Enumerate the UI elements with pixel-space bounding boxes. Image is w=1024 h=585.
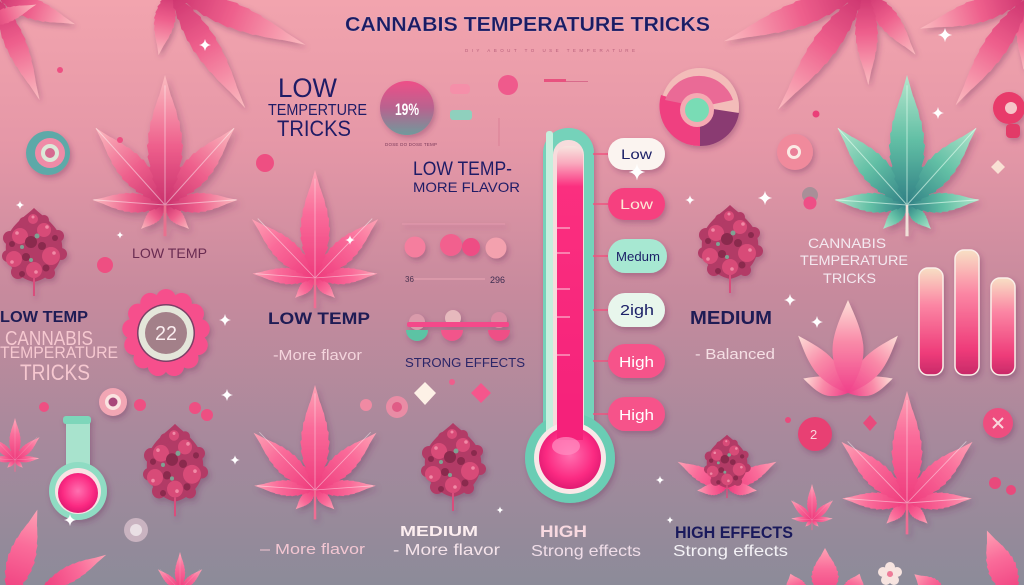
heading: low temperture tricks [268,73,367,141]
icon: target left [99,388,127,416]
big leaf: low temp left [85,75,245,236]
pill: medium [608,239,667,273]
left pink title: TRICKS [20,360,90,385]
badge: 19 percent [380,81,434,135]
heading: low temperture tricks: TEMPERTURE [268,102,367,119]
right caption: CANNABIS [808,235,886,251]
pill: low white: Low [621,146,653,162]
badge: 19 percent: 19% [395,100,419,119]
sparkles [16,28,952,526]
red ring icon [993,92,1024,138]
icon: button two [798,417,832,451]
bar chart [919,250,1015,375]
label: strong effects: Strong effects [531,543,641,560]
range line: 36 [405,275,414,284]
bud: bottom left [143,424,208,516]
icons: small markers centre [124,396,408,542]
label: low temp far left: LOW TEMP [0,309,88,326]
title: CANNABIS TEMPERATURE TRICKS [345,14,710,36]
icon: small dots left [39,67,274,421]
range line [405,275,505,285]
subheading: low temp more flavor [413,159,520,195]
label: low temp bold: LOW TEMP [268,309,370,328]
bottom blades right [780,525,1024,585]
pill: high pink two [608,397,665,431]
icon: small marks right [785,415,1016,495]
label: high effects: HIGH EFFECTS [675,523,793,542]
right caption [800,235,908,286]
pill: high pink two: High [619,407,654,424]
pill: low white [608,138,665,170]
target icon right [777,134,813,170]
sub-caption: DIY ABOUT TO USE TEMPERATURE [465,48,635,53]
bud: medium [698,205,763,293]
leaf and bud: high [674,435,780,498]
gear badge: 22 [155,323,177,345]
flower [878,562,902,585]
label: balanced: - Balanced [695,346,775,363]
right caption: TRICKS [823,270,876,286]
pill: high pink one: High [619,354,654,371]
leaves: top centre-left [148,0,310,115]
big leaf: bottom right [833,391,981,534]
small leaf bottom left [0,418,43,472]
label: medium: MEDIUM [690,308,772,328]
connector lines [593,154,608,414]
gear badge [121,289,211,378]
donut chart [659,68,739,146]
pill: high white: 2igh [620,302,654,319]
slider graphic [406,310,510,341]
pill: high white [608,293,665,327]
bud: bottom centre [421,423,486,511]
label: more flavor white: - More flavor [393,542,501,559]
pill: high pink one [608,344,665,378]
pill: low pink [608,188,665,220]
icon: button two: 2 [810,427,817,442]
leaves: top centre-right [720,0,924,117]
subheading: low temp more flavor: MORE FLAVOR [413,179,520,195]
caption under badge: DOSE DO DOSE TEMP [385,142,437,147]
leaf: low temp centre [244,170,386,308]
small icons right [802,110,1005,210]
leaves: top-right corner [916,0,1024,112]
icon: teal badge [26,131,70,175]
label: high: HIGH [540,522,587,541]
range line: 296 [490,275,505,285]
label: low temp: LOW TEMP [132,245,207,261]
bottom leaf left centre [155,552,205,585]
bottom blades left [0,505,110,585]
label: more flavor: -More flavor [273,347,362,364]
bud: top left [2,208,67,296]
label: more flavor bottom: – More flavor [260,541,365,558]
small leaf: bottom centre right [788,484,836,530]
label: strong effects: STRONG EFFECTS [405,355,525,370]
dots row chart [402,224,506,258]
thermometer [525,128,615,503]
big leaf: bottom centre [246,385,384,519]
subheading: low temp more flavor: LOW TEMP- [413,159,512,180]
icon: button x [983,408,1013,438]
heading: low temperture tricks: TRICKS [277,116,351,141]
diamonds [414,379,491,405]
teal leaf [827,75,987,236]
left pink title [0,328,118,385]
pill: medium: Medum [616,249,660,264]
tiny chart details [450,75,588,146]
heading: low temperture tricks: LOW [278,73,337,103]
leaves: top-left corner [0,0,79,104]
label: strong effects white: Strong effects [673,543,788,560]
flask [49,416,107,520]
right caption: TEMPERATURE [800,252,908,268]
pink petal leaf [790,300,906,402]
label: medium white: MEDIUM [400,523,478,540]
left pink title: CANNABIS [5,328,93,350]
left pink title: TEMPERATURE [0,343,118,362]
pill: low pink: Low [620,196,654,212]
